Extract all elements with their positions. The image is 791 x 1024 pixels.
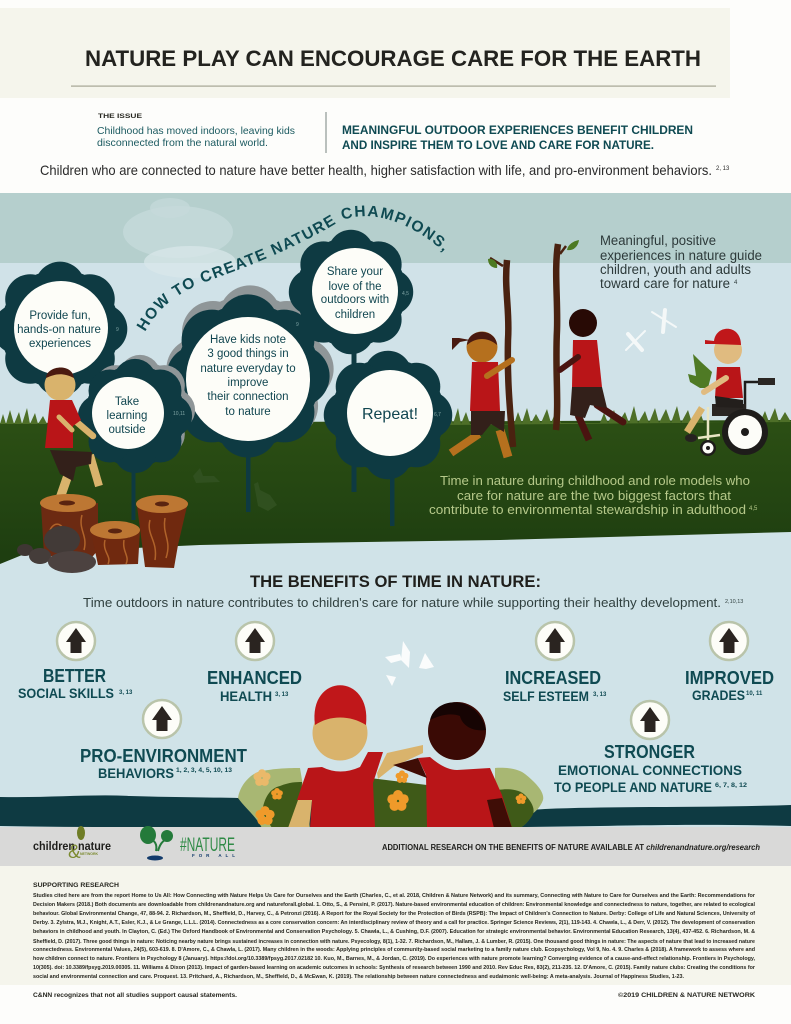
text block: the issue: disconnected from the natural world.: [97, 137, 268, 149]
panel: supporting research: [0, 866, 791, 985]
bushes with flowers: [238, 768, 543, 828]
flower: share your love: [289, 230, 413, 354]
flower: provide fun: [0, 262, 127, 396]
panel: supporting research: behaviour. Global Environmental Change, 47, 88-94. 2. Richardson, M., Sheffield, D., Harvey, C., & Petronzi (2016). A Report for the Royal Society for the Protection of Birds (RSPB): The Impact of Children's Connection to Nature. Derby: College of Life and Natural Sciences, University of: [33, 911, 755, 917]
text block: role models: Time in nature during childhood and role models who: [440, 473, 750, 488]
panel: supporting research: connectedness. Environmental Values, 24(5), 603-619. 8. D'Amore, C., & Chawla, L. (2017). Many children in the woods: Applying principles of community-based social marketing to a family nature club. Ecopsychology, Vol 9, No. 4. 9. Charles & (2018). A framework to assess where and: [33, 947, 755, 953]
panel: supporting research: social and environmental connection and care. Proquest. 13. Pritchard, A., Richardson, M., Sheffield, D., & McEwan, K. (2019). The relationship between nature connectedness and eudaimonic well-being: A meta-analysis. Journal of Happiness Studies, 1-23.: [33, 974, 685, 980]
flower: three good things: their connection: [207, 391, 289, 403]
logo: children and nature network: children nature: [33, 841, 111, 853]
logo: children and nature network: &: [68, 842, 81, 863]
logo: nature for all: FOR ALL: [192, 853, 235, 858]
boy with walking stick: [556, 240, 623, 440]
panel: title header: [0, 8, 730, 98]
flower: three good things: nature everyday to: [200, 363, 296, 375]
benefit: better social skills: SOCIAL SKILLS: [18, 685, 114, 701]
flower: take learning outside: learning: [107, 410, 147, 422]
benefit: stronger connections: 6, 7, 8, 12: [715, 783, 748, 789]
panel: sky background: [0, 193, 791, 830]
flower: three good things: Have kids note: [210, 334, 286, 346]
flower: provide fun: hands-on nature: [17, 324, 101, 336]
tree stumps and rocks: [17, 494, 188, 573]
flower: provide fun: Provide fun,: [29, 310, 91, 322]
benefit: enhanced health: ENHANCED: [207, 668, 302, 688]
text block: meaningful experiences: [600, 233, 762, 291]
icon: white birds: [385, 641, 434, 686]
benefit: enhanced health: 3, 13: [275, 692, 289, 698]
benefit: better social skills: BETTER: [43, 666, 106, 686]
flower: share your love: 4,5: [402, 291, 409, 297]
text block: the issue: THE ISSUE: [98, 113, 143, 120]
child in wheelchair with leaf: [685, 329, 775, 456]
text block: the issue: Childhood has moved indoors, leaving kids: [97, 125, 295, 137]
panel: supporting research: 10(305). doi: 10.3389/fpsyg.2019.00305. 11. Williams & Dixon (2013). Impact of garden-based learning on academic outcomes in schools: Synthesis of research between 1990 and 2010. Rev Educ Res, 83(2), 211-235. 12. D'Amore, C. (2015). Family nature clubs: Creating the conditions for: [33, 965, 755, 971]
rabbits: [193, 468, 277, 511]
text block: meaningful experiences: children, youth and adults: [600, 262, 751, 277]
benefit: increased self esteem: [503, 622, 607, 704]
flower: share your love: love of the: [328, 281, 382, 293]
panel: supporting research: behaviors in childhood and youth. In Clayton, C. (Ed.) The Oxford Handbook of Environmental and Conservation Psychology. 5. Chawla, L., & Cushing, D.F. (2007). Education for strategic environmental behavior. Environmental Education Research, 13(4), 437-452. 6. Richardson, M. &: [33, 929, 755, 935]
text block: meaningful experiences: toward care for nature: [600, 276, 730, 291]
benefit: enhanced health: [207, 622, 302, 704]
benefit: pro-environment behaviors: PRO-ENVIRONMENT: [80, 746, 247, 766]
logo: children and nature network: NETWORK: [80, 852, 99, 856]
benefit: enhanced health: HEALTH: [220, 688, 272, 704]
flower: take learning outside: 10,11: [173, 411, 185, 417]
text block: role models: 4,5: [749, 506, 758, 512]
flower: provide fun: 9: [116, 327, 119, 333]
benefit: increased self esteem: INCREASED: [505, 668, 601, 688]
text block: meaningful experiences: 4: [734, 280, 738, 286]
icon: dragonflies: [626, 310, 676, 350]
title: NATURE PLAY CAN ENCOURAGE CARE FOR THE EARTH: [85, 46, 701, 71]
flower: repeat: Repeat!: [362, 406, 418, 423]
text block: role models: care for nature are the two biggest factors that: [457, 488, 731, 503]
panel: supporting research: Derby. 3. Zylstra, M.J., Knight, A.T., Esler, K.J., & Le Grange, L.L.L. (2014). Connectedness as a core conservation concern: An interdisciplinary review of theory and a call for practice. Springer Science Reviews, 2(1), 119-143. 4. Chawla, L., & Derr, V. (2012). The development of conservation: [33, 920, 755, 926]
panel: supporting research: Studies cited here are from the report Home to Us All: How Connecting with Nature Helps Us Care for Ourselves and the Earth (Charles, C., et al. 2018, Children & Nature Network) and its summary, Connecting with Nature to Care for Ourselves and the Earth: Recommendations for: [33, 893, 755, 899]
benefit: better social skills: 3, 13: [119, 690, 133, 696]
flower: three good things: 9: [296, 322, 299, 328]
text block: connected children sentence: Children who are connected to nature have better health, higher satisfaction with life, and pro-environment behaviors.: [40, 162, 712, 178]
panel: supporting research: Decision Makers (2018.) Both documents are downloadable from childrenandnature.org and natureforall.global. 1. Otto, S., & Pensini, P. (2017). Nature-based environmental education of children: Environmental knowledge and connectedness to nature, together, are related to ecological: [33, 902, 756, 908]
benefit: improved grades: GRADES: [692, 687, 745, 703]
flower: take learning outside: outside: [108, 424, 146, 436]
flower: provide fun: experiences: [29, 338, 91, 350]
copyright: ©2019 CHILDREN & NATURE NETWORK: [618, 991, 755, 999]
heading: benefits: THE BENEFITS OF TIME IN NATURE:: [250, 573, 541, 591]
benefit: pro-environment behaviors: [80, 700, 247, 781]
flower: share your love: children: [335, 309, 375, 321]
benefit: stronger connections: [554, 701, 748, 795]
flower: repeat: [324, 351, 452, 479]
grass field: [0, 406, 791, 564]
text block: benefits intro: 2,10,13: [725, 599, 743, 605]
panel: supporting research: how children connect to nature. Frontiers in Psychology 8 (January). https://doi.org/10.3389/fpsyg.2017.02182 10. Kuo, M., Barnes, M., & Jordan, C. (2019). Do experiences with nature promote learning? Converging evidence of a cause-and-effect relationship. Frontiers in Psychology,: [33, 956, 756, 962]
flower: three good things: improve: [228, 377, 268, 389]
note: causal statements: C&NN recognizes that not all studies support causal statements.: [33, 992, 237, 999]
flower: share your love: Share your: [327, 266, 383, 278]
text block: benefits intro: Time outdoors in nature contributes to children's care for nature while supporting their healthy development.: [83, 595, 721, 610]
benefit: stronger connections: EMOTIONAL CONNECTIONS: [558, 762, 742, 778]
link text: additional research: ADDITIONAL RESEARCH ON THE BENEFITS OF NATURE AVAILABLE AT childrenandnature.org/research: [382, 843, 760, 852]
panel: footer band: [0, 826, 791, 866]
text block: key message: MEANINGFUL OUTDOOR EXPERIENCES BENEFIT CHILDREN: [342, 125, 693, 137]
benefit: pro-environment behaviors: 1, 2, 3, 4, 5, 10, 13: [176, 768, 233, 774]
text block: meaningful experiences: Meaningful, positive: [600, 233, 716, 248]
benefit: better social skills: [18, 622, 133, 701]
benefit: improved grades: IMPROVED: [685, 668, 774, 688]
benefit: increased self esteem: SELF ESTEEM: [503, 688, 589, 704]
panel: supporting research: SUPPORTING RESEARCH: [33, 883, 119, 889]
text block: meaningful experiences: experiences in nature guide: [600, 248, 762, 263]
flower: three good things: 3 good things in: [207, 348, 289, 360]
text block: key message: AND INSPIRE THEM TO LOVE AND CARE FOR NATURE.: [342, 140, 654, 152]
logo: nature for all: [140, 826, 235, 860]
text block: the issue: [97, 113, 295, 149]
two children sitting with arm around shoulder: [288, 685, 512, 828]
flower: repeat: 6,7: [434, 412, 441, 418]
logo: nature for all: #NATURE: [180, 835, 235, 856]
text block: key message: [342, 125, 693, 152]
benefit: improved grades: [685, 622, 774, 703]
text block: role models: contribute to environmental stewardship in adulthood: [429, 502, 746, 517]
text block: role models: [429, 473, 758, 517]
benefit: stronger connections: TO PEOPLE AND NATURE: [554, 779, 712, 795]
dark teal ground: [0, 795, 791, 830]
flower: three good things: [166, 285, 334, 458]
text block: connected children sentence: 2, 13: [716, 166, 730, 172]
boy on stumps: [44, 367, 99, 504]
girl with walking stick: [451, 258, 513, 457]
benefit: increased self esteem: 3, 13: [593, 692, 607, 698]
benefit: stronger connections: STRONGER: [604, 742, 695, 762]
flower stems: [132, 345, 394, 526]
benefit: pro-environment behaviors: BEHAVIORS: [98, 765, 174, 781]
flower: share your love: outdoors with: [321, 294, 389, 306]
curved heading: how to create nature champions: HOW TO CREATE NATURE CHAMPIONS,: [136, 206, 444, 331]
benefit: improved grades: 10, 11: [746, 691, 763, 697]
flower: take learning outside: Take: [115, 396, 139, 408]
flower: take learning outside: [78, 355, 195, 473]
flower: three good things: to nature: [225, 406, 271, 418]
logo: children and nature network: [33, 826, 111, 863]
panel: supporting research: Sheffield, D. (2017). Three good things in nature: Noticing nearby nature brings sustained increases in connection with nature. Psyecology, 8(1), 1-32. 7. Richardson, M., Hallam, J. & Lumber, R. (2015). One thousand good things in nature: The aspects of nature that lead to increased nature: [33, 939, 755, 945]
